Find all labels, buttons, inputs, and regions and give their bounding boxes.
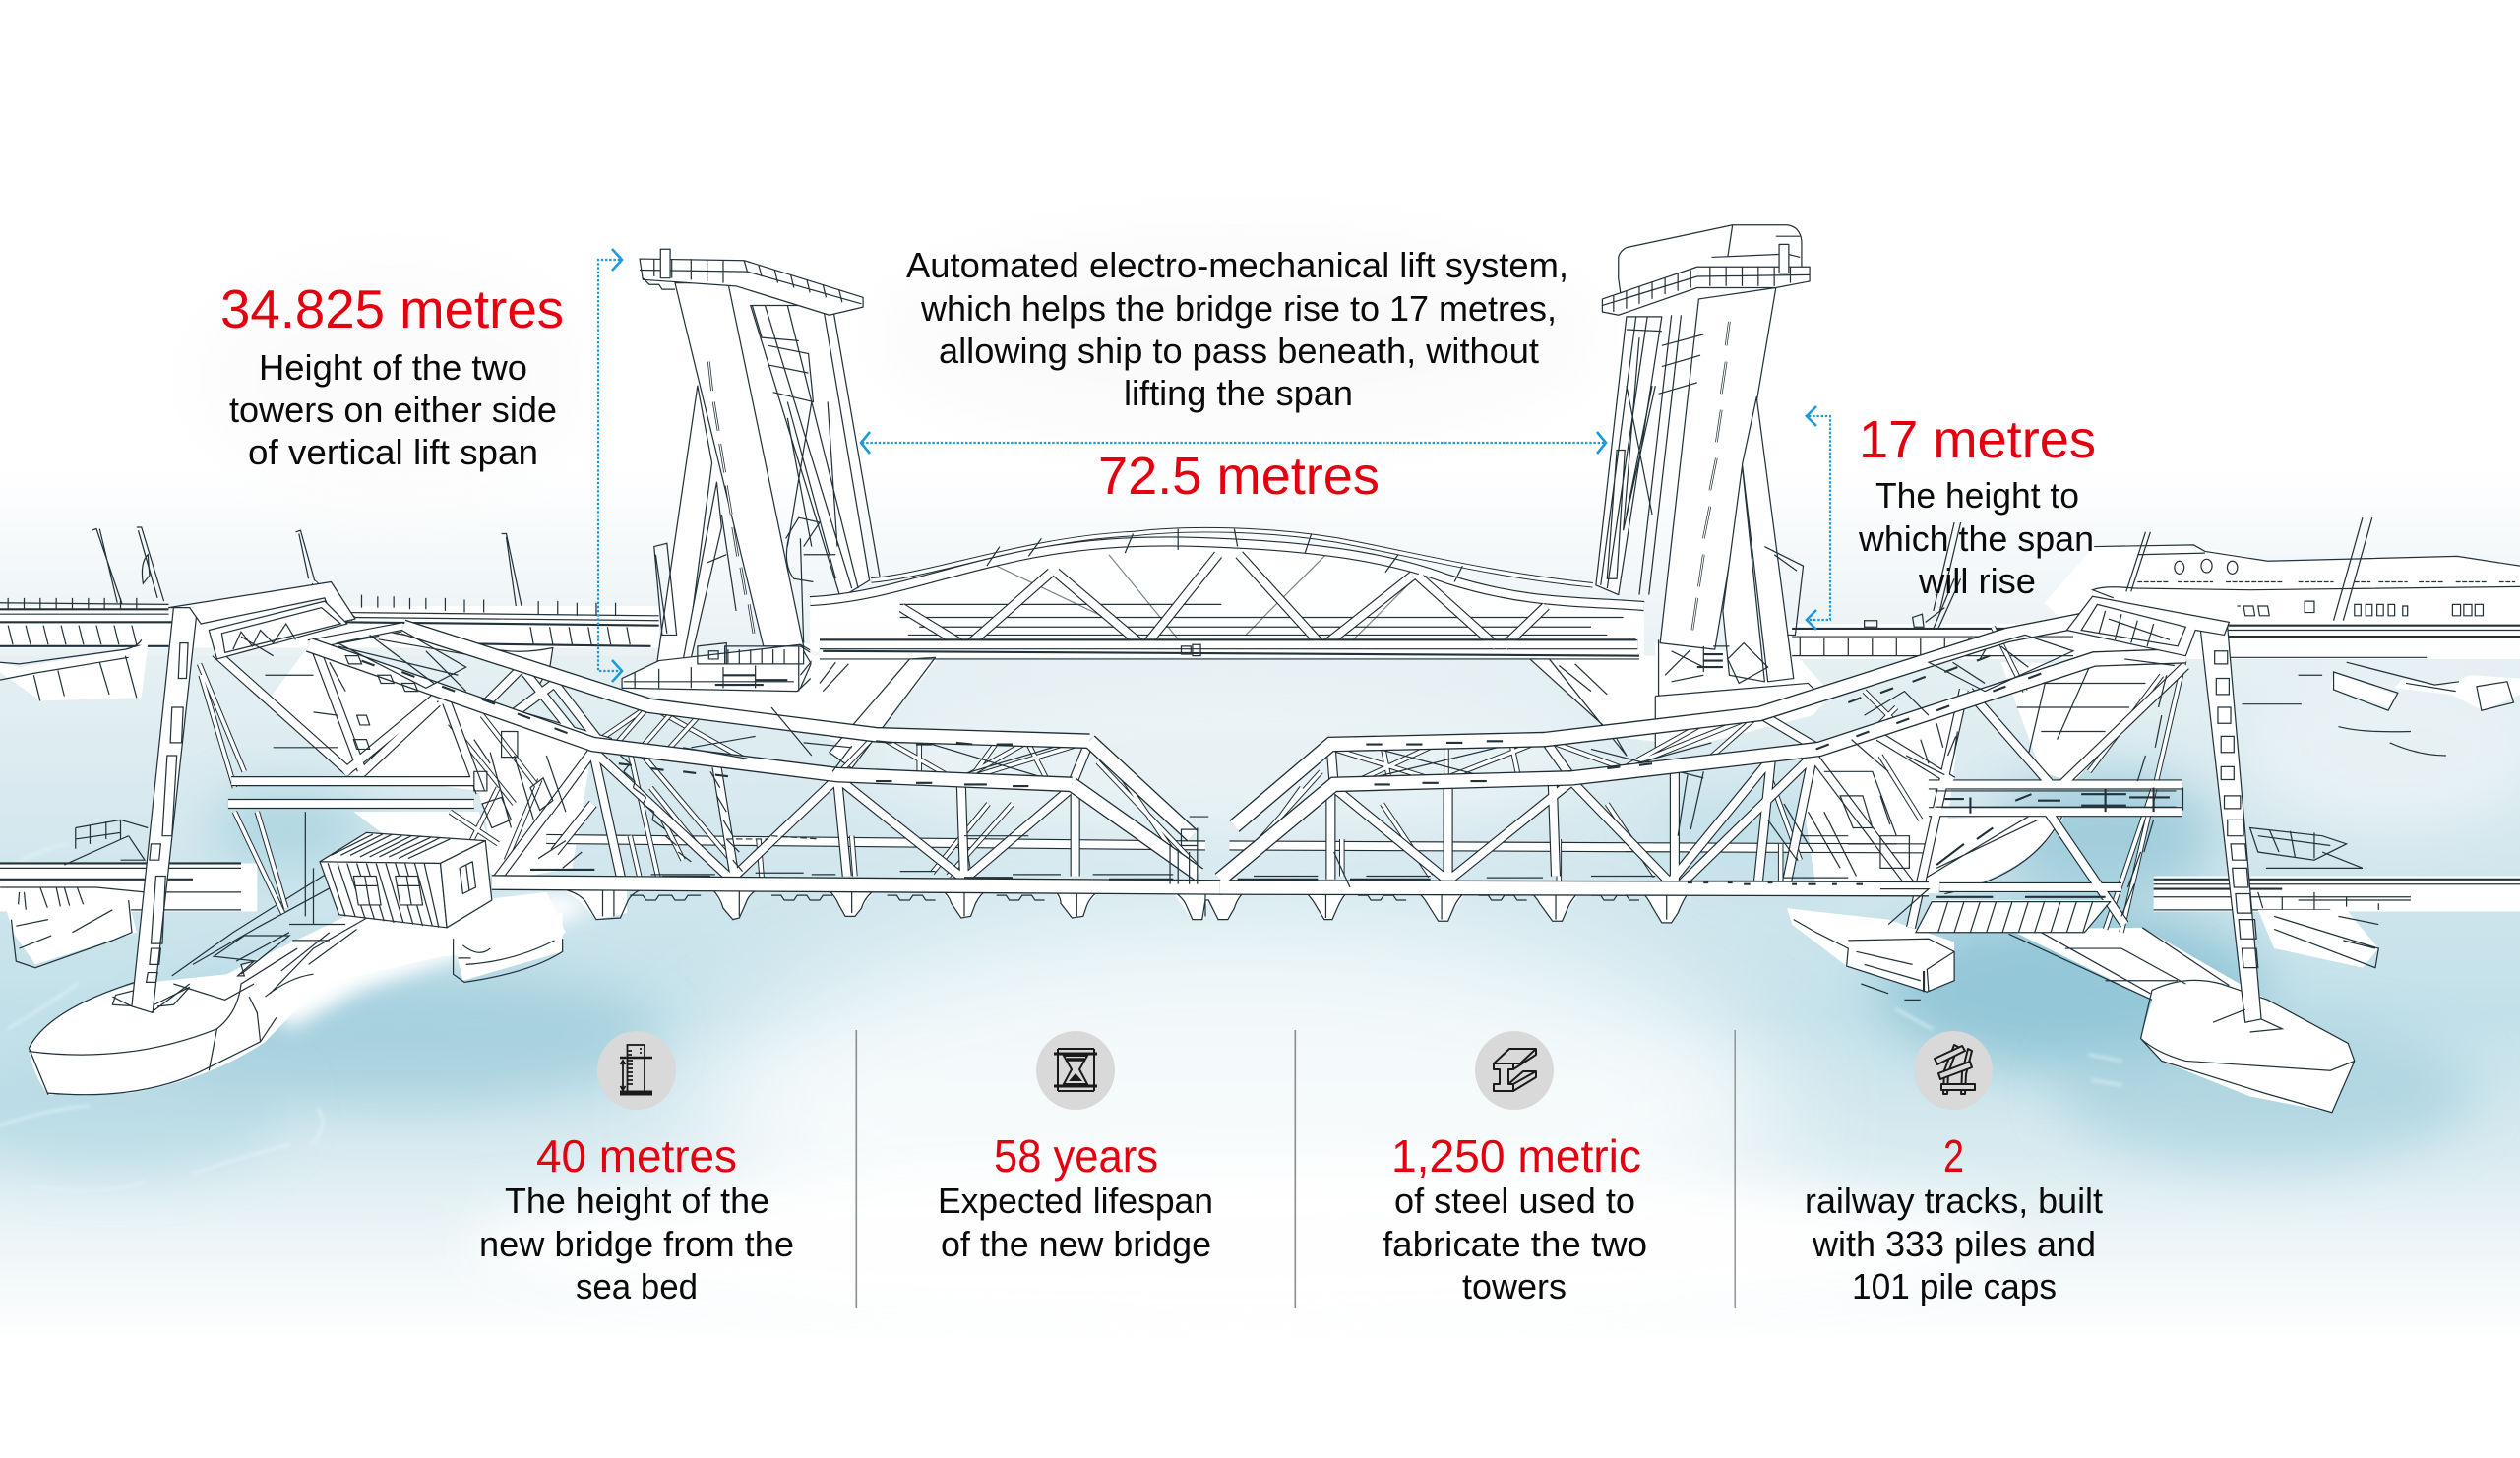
stat: 40 metres (479, 1031, 794, 1306)
mast over the 17 metres text (1934, 522, 1961, 611)
stat: 1,250 metric (1383, 1031, 1647, 1306)
old bridge: left leaf truss (200, 582, 1431, 913)
water ripples (0, 844, 2121, 1191)
dimension arrow: 17 metres (1807, 406, 1830, 630)
old bridge: rail deck across channel (0, 828, 2520, 968)
callout: 34.825 metres: of vertical lift span (248, 432, 538, 472)
callout: 34.825 metres: towers on either side (229, 390, 557, 430)
stat: 1,250 metric: towers (1462, 1266, 1567, 1306)
callout: 17 metres: 17 metres (1859, 410, 2096, 469)
stat: 2 railway tracks: 101 pile caps (1852, 1266, 2057, 1306)
callout: lift system: allowing ship to pass beneath, without (939, 331, 1539, 371)
callout: lift system: which helps the bridge rise to 17 metres, (920, 288, 1557, 329)
stat: 2 railway tracks (1805, 1031, 2103, 1306)
old bridge: right end frame post (2066, 596, 2282, 1032)
stat: 2 railway tracks: railway tracks, built (1805, 1181, 2103, 1221)
masts behind the old bridge (92, 527, 523, 617)
stat: 58 years: 58 years (994, 1130, 1158, 1182)
icon: ruler (597, 1031, 676, 1110)
dimension arrow: 34.825 metres (598, 249, 622, 682)
stat: 40 metres: 40 metres (536, 1130, 737, 1182)
old bridge: left end frame post (112, 582, 355, 1012)
small boats right (2242, 662, 2520, 756)
dimension arrow: 72.5 metres (861, 432, 1606, 454)
callout: 72.5 metres: 72.5 metres (1098, 447, 1380, 506)
old bridge: white counterweight backing (265, 646, 2181, 894)
stat: 1,250 metric: of steel used to (1394, 1181, 1635, 1221)
old bridge: right long pier (2009, 928, 2355, 1113)
back viaduct: right (1787, 578, 2520, 659)
icon: steel I-beam (1475, 1031, 1554, 1110)
callout: 34.825 metres (220, 278, 564, 472)
old bridge: lower box girder right (1916, 897, 2111, 933)
trackside hut (241, 812, 492, 974)
back lift span: arched truss (809, 529, 1663, 768)
callout: 17 metres: The height to (1875, 475, 2079, 516)
old bridge: second pier (452, 913, 563, 982)
callout: 34.825 metres: 34.825 metres (220, 278, 564, 339)
old bridge: back chords and lattice of the leaves (546, 705, 2009, 881)
left mooring deck behind the post (64, 820, 148, 865)
ship behind the old bridge (2045, 517, 2520, 631)
back viaduct: left (0, 595, 659, 700)
stat: 40 metres: sea bed (576, 1266, 698, 1306)
stat: 1,250 metric: fabricate the two (1383, 1224, 1647, 1264)
back lift span: left tower (622, 249, 881, 731)
stat: 2 railway tracks: 2 (1943, 1130, 1964, 1182)
stat: 1,250 metric: 1,250 metric (1391, 1130, 1641, 1182)
stat: 58 years (938, 1031, 1213, 1264)
callout: 17 metres: will rise (1918, 561, 2036, 601)
stat: 40 metres: The height of the (505, 1181, 769, 1221)
stat: 2 railway tracks: with 333 piles and (1812, 1224, 2096, 1264)
callout: 17 metres: which the span (1858, 518, 2094, 559)
callout: 17 metres (1858, 410, 2096, 601)
back lift span: right tower (1596, 225, 1832, 756)
callout: 34.825 metres: Height of the two (259, 347, 527, 388)
old bridge: right small pier (1787, 908, 1954, 1000)
bridge illustration (0, 225, 2520, 1191)
stat: 58 years: of the new bridge (941, 1224, 1211, 1264)
icon: railway tracks (1914, 1031, 1993, 1110)
divider (1734, 1030, 1736, 1308)
stat: 58 years: Expected lifespan (938, 1181, 1213, 1221)
callout: lift system: Automated electro-mechanical lift system, (906, 245, 1568, 285)
stat: 40 metres: new bridge from the (479, 1224, 794, 1264)
old bridge: left pier (29, 865, 594, 1095)
old bridge: hanging floor brackets (563, 887, 1690, 923)
divider (856, 1030, 857, 1308)
callout: lift system (906, 245, 1568, 413)
icon: hourglass (1036, 1031, 1115, 1110)
old bridge: right leaf truss (1220, 604, 2185, 933)
callout: lift system: lifting the span (1124, 373, 1353, 413)
divider (1295, 1030, 1296, 1308)
